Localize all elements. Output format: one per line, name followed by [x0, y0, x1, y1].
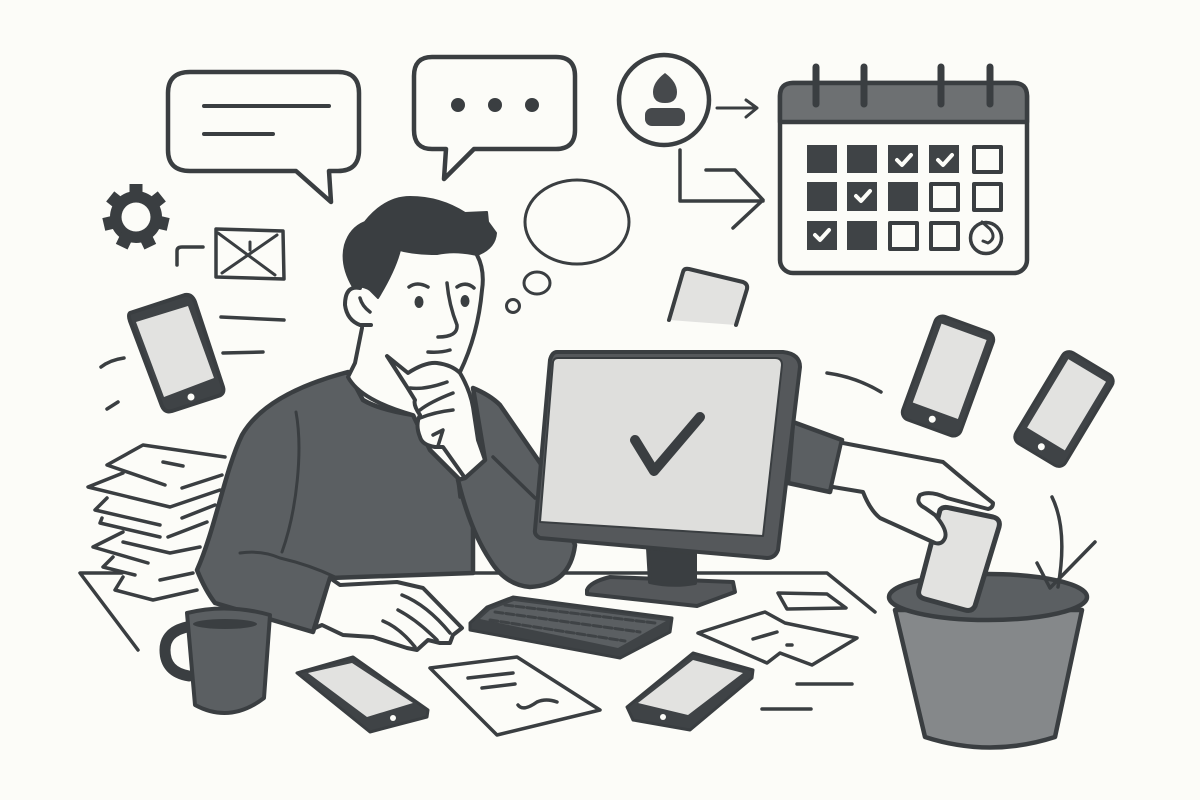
trash bin [889, 574, 1087, 748]
user icon circle [619, 55, 709, 145]
envelope icon [177, 229, 284, 279]
phone left [129, 295, 223, 411]
arrow to calendar [717, 100, 757, 117]
speech bubble with lines [168, 72, 359, 202]
man lower hand [315, 578, 462, 650]
motion lines left [101, 317, 284, 409]
monitor stand [587, 548, 735, 606]
thought bubble [506, 180, 629, 312]
man hand on chin [387, 356, 485, 478]
calendar grid [807, 145, 1002, 254]
phone in bin [919, 507, 999, 610]
man neck and face [345, 250, 483, 415]
phone right one [900, 314, 996, 438]
bin arrow [1037, 497, 1095, 588]
speech bubble with dots [414, 57, 575, 179]
keyboard [470, 597, 672, 658]
paper stack [88, 445, 225, 600]
small paper on desk [778, 593, 846, 609]
falling phone top center [669, 269, 747, 325]
motion line right [827, 373, 881, 392]
elbow arrow to calendar [680, 150, 763, 228]
gear icon [104, 184, 168, 247]
reaching arm sleeve [788, 422, 842, 492]
motion lines desk [762, 684, 852, 709]
man arm on chin [458, 388, 575, 587]
folded paper on desk [698, 612, 857, 665]
reaching hand [833, 443, 993, 543]
man sweater torso [197, 372, 473, 632]
monitor [535, 352, 800, 558]
desk outline [80, 573, 875, 650]
phone on desk right [627, 653, 753, 730]
phone on desk left [297, 657, 428, 732]
paper with lines on desk [430, 657, 600, 735]
coffee mug [165, 608, 270, 713]
man hair [344, 197, 496, 298]
phone right two [1012, 349, 1116, 469]
calendar [780, 67, 1027, 273]
